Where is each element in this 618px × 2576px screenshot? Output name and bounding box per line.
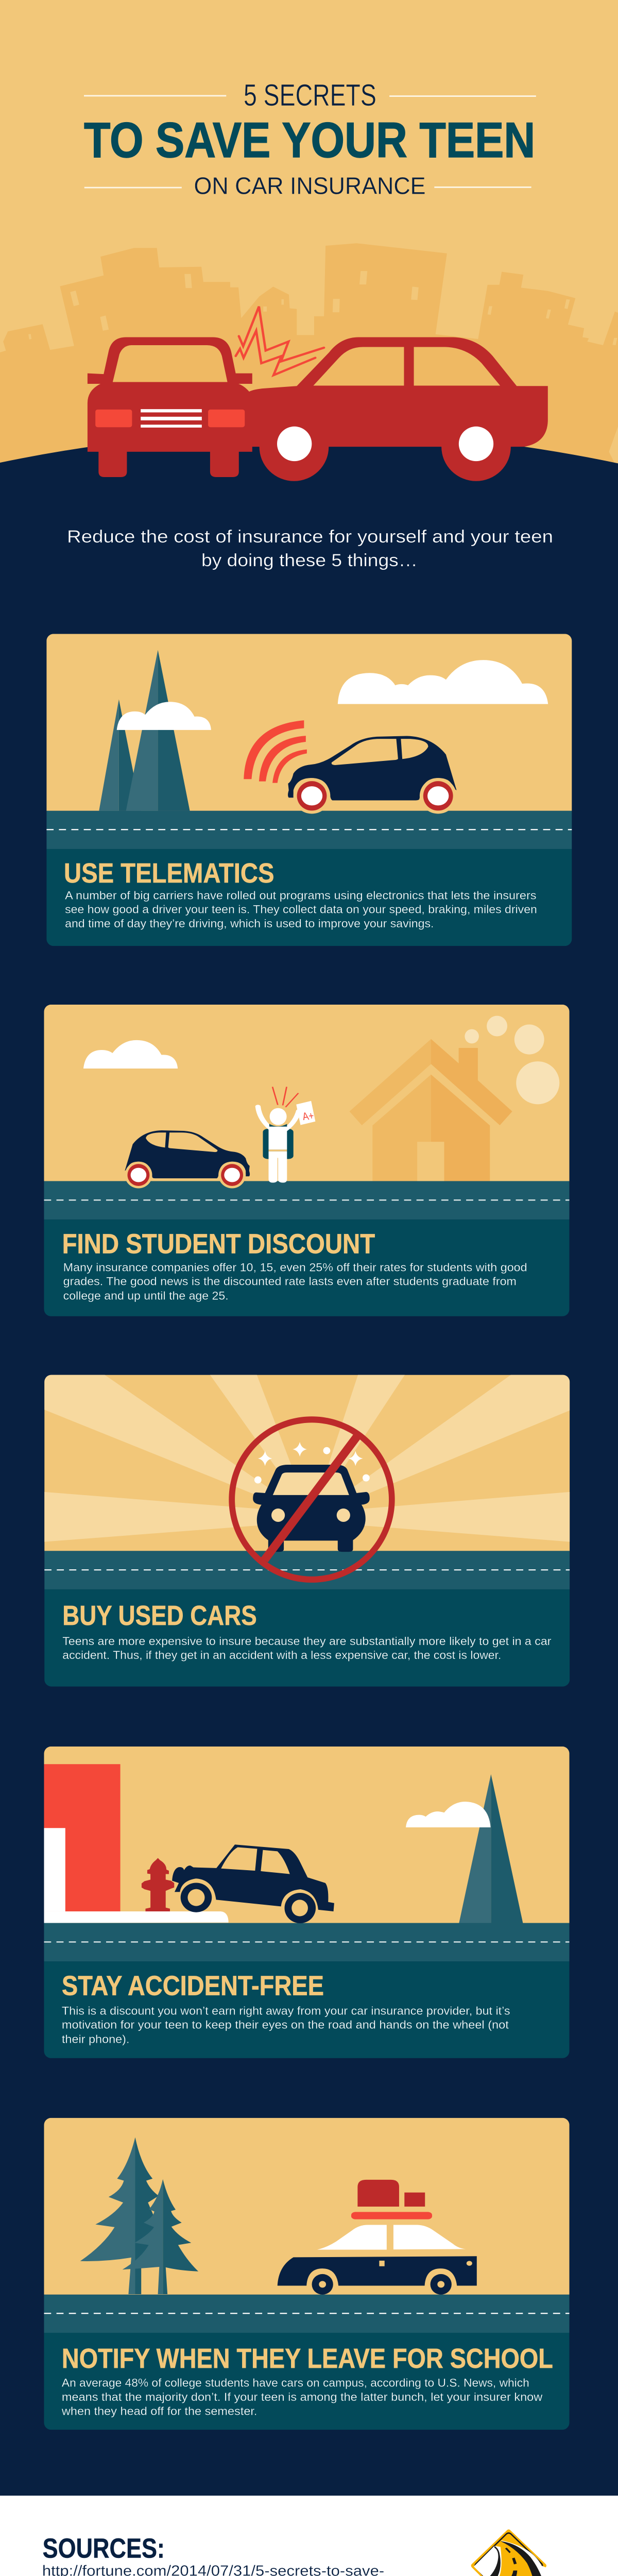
heading: USE TELEMATICS: [64, 858, 274, 889]
body text: college and up until the age 25.: [63, 1290, 229, 1302]
panel: find student discount: [44, 1005, 570, 1316]
intro text: by doing these 5 things…: [201, 551, 418, 570]
header: [0, 0, 618, 567]
icon: chimney smoke: [465, 1016, 559, 1104]
heading: BUY USED CARS: [62, 1600, 257, 1631]
icon: student with grade paper: [258, 1087, 315, 1183]
panel: use telematics: [46, 634, 572, 946]
intro text: [67, 527, 553, 570]
icon: large cloud: [338, 660, 548, 704]
icon: cloud: [406, 1802, 491, 1827]
icon: fire hydrant: [142, 1858, 174, 1911]
body text: [62, 1635, 551, 1662]
icon: signal waves: [244, 720, 307, 783]
icon: prohibition sign: [229, 1416, 395, 1583]
crash spark: [236, 307, 324, 375]
body text: their phone).: [62, 2033, 129, 2046]
heading: STAY ACCIDENT-FREE: [62, 1971, 324, 2002]
city skyline: [0, 243, 618, 470]
icon: small cloud: [117, 702, 211, 730]
icon: student with grade paper: A+: [301, 1110, 315, 1123]
body text: [62, 2005, 510, 2046]
icon: cloud: [83, 1040, 178, 1069]
intro text: Reduce the cost of insurance for yourself and your teen: [67, 527, 553, 547]
body text: [61, 2377, 543, 2418]
icon: pine trees: [80, 2138, 198, 2294]
panel: buy used cars: [44, 1375, 570, 1687]
icon: navy car: [125, 1130, 250, 1188]
icon: front view navy car: [253, 1465, 370, 1552]
icon: road sign: [462, 2532, 546, 2576]
footer: sources: SOURCES:: [43, 2533, 165, 2564]
title line: on car insurance: ON CAR INSURANCE: [194, 173, 426, 199]
icon: sparkles: [254, 1442, 370, 1483]
panel: stay accident-free: [44, 1747, 570, 2058]
icon: side view red car: [248, 337, 548, 481]
icon: building and curb: [44, 1764, 229, 1923]
panel: notify when they leave for school: [44, 2118, 570, 2430]
icon: house: [350, 1039, 512, 1181]
icon: mountain: [459, 1774, 523, 1923]
icon: front view red car: [88, 337, 252, 477]
logo: DriveRite Academy: [444, 2532, 564, 2576]
title line: 5 secrets: 5 SECRETS: [244, 78, 376, 112]
icon: car with roof luggage: [278, 2180, 477, 2295]
heading: FIND STUDENT DISCOUNT: [62, 1229, 375, 1260]
icon: tilted navy car: [172, 1844, 334, 1923]
body text: [65, 889, 537, 930]
ground horizon: [0, 431, 618, 567]
icon: navy car: [288, 736, 457, 814]
body text: [63, 1261, 527, 1302]
footer: sources: [42, 2533, 396, 2576]
icon: mountains: [99, 650, 190, 811]
body text: when they head off for the semester.: [61, 2405, 257, 2418]
